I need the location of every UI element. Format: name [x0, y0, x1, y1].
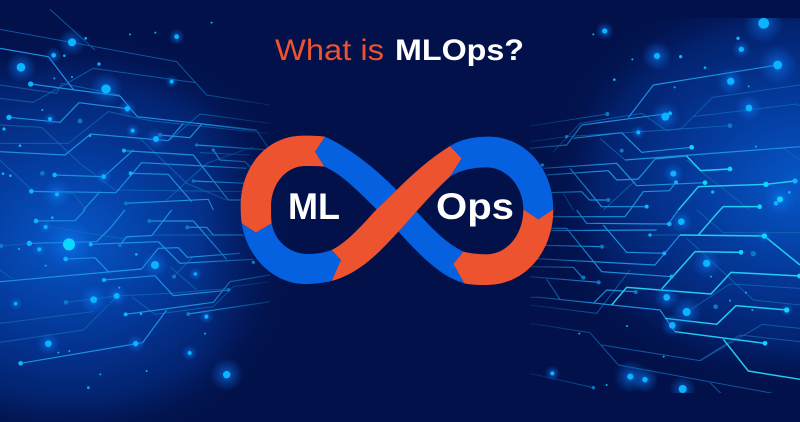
loop segment: orange lower right — [453, 209, 553, 285]
glowing nodes: lower right — [544, 210, 800, 402]
circuit lines: lower left — [0, 210, 270, 363]
title: orange words: What is — [275, 34, 384, 67]
circuit lines: upper left — [0, 9, 270, 210]
clipped dark bands at top and bottom right — [530, 0, 800, 422]
loop segment: blue upper right — [450, 137, 553, 219]
centre fade over circuit lines — [200, 0, 600, 422]
label: Ops: Ops — [436, 186, 514, 227]
loop segment: orange centre — [332, 146, 462, 281]
label: ML: ML — [288, 186, 340, 227]
circuit lines: lower right — [530, 210, 800, 418]
glowing nodes: lower left — [0, 216, 255, 391]
loop segment: blue centre — [315, 137, 464, 283]
loop segment: orange upper left — [241, 136, 325, 233]
glowing nodes: upper right — [541, 3, 798, 216]
title: white bold word: MLOps? — [395, 34, 524, 67]
circuit lines: upper right — [530, 65, 800, 210]
loop segment: blue lower left — [242, 223, 341, 284]
title — [275, 34, 524, 67]
glowing nodes: upper left — [2, 22, 215, 209]
infinity loop — [241, 136, 553, 285]
